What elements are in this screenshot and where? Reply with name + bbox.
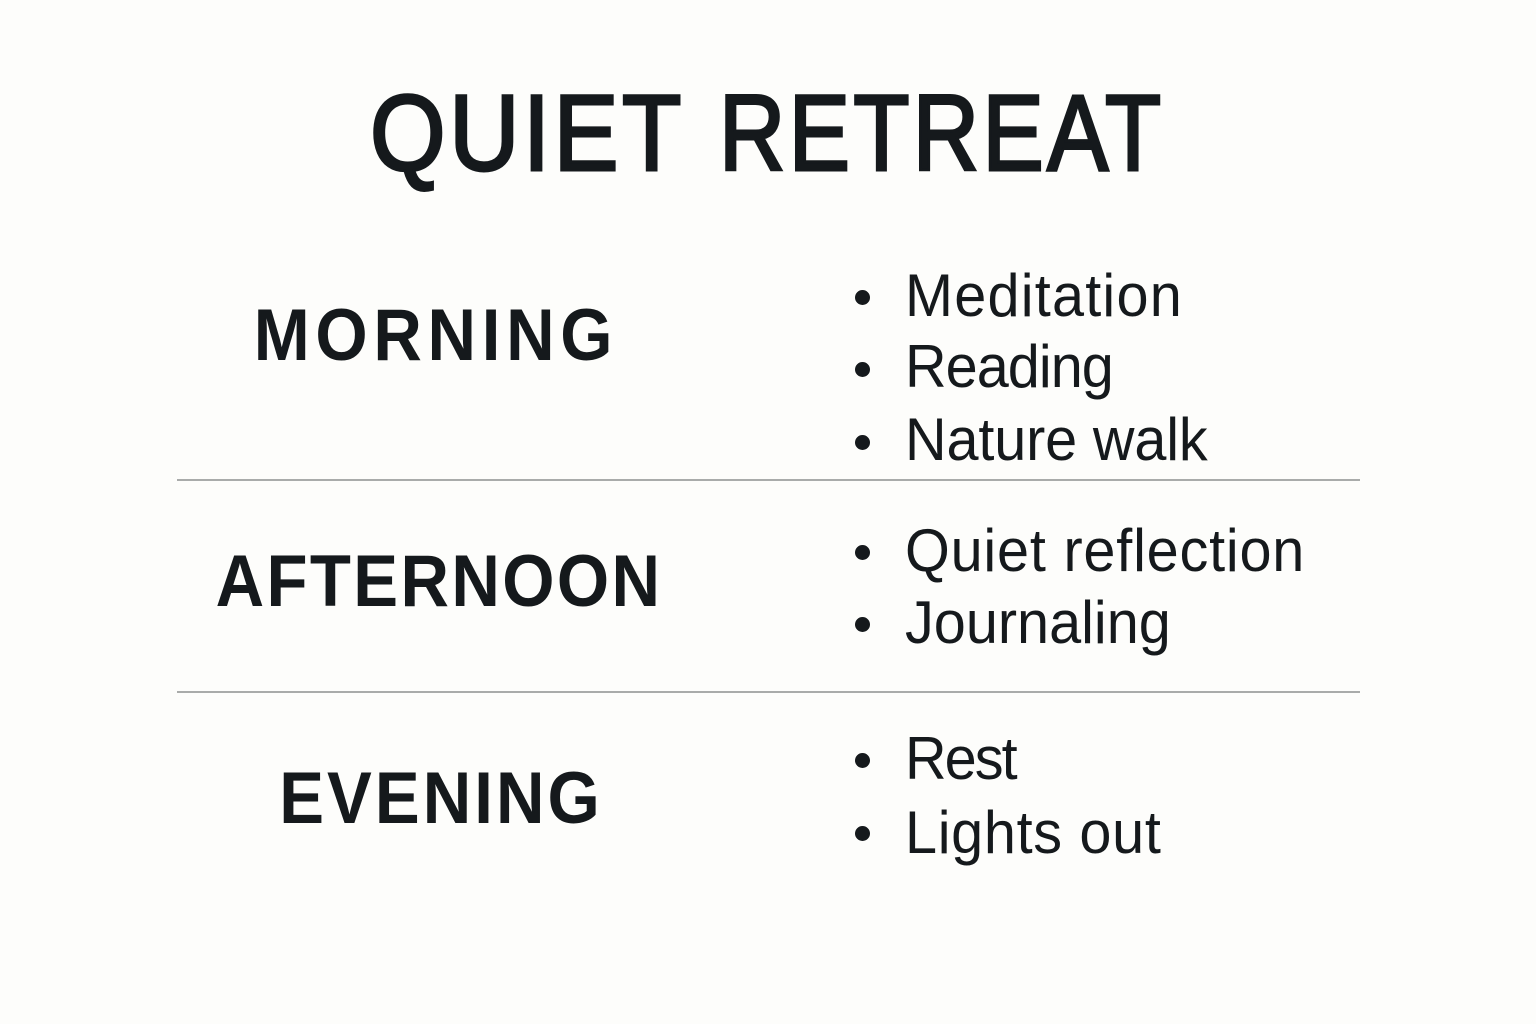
heading: afternoon: AFTERNOON bbox=[216, 541, 662, 622]
list: evening activities: Rest bbox=[905, 725, 1016, 792]
heading: evening: EVENING bbox=[279, 758, 603, 839]
title: RETREAT bbox=[719, 72, 1164, 193]
heading: morning: MORNING bbox=[254, 295, 618, 376]
title: QUIET bbox=[370, 72, 685, 193]
list: morning activities: Reading bbox=[905, 333, 1113, 400]
list: afternoon activities: Journaling bbox=[905, 589, 1171, 656]
list: morning activities: Nature walk bbox=[905, 406, 1208, 473]
list: morning activities bbox=[855, 262, 1208, 473]
list: afternoon activities bbox=[855, 517, 1305, 656]
list: morning activities: Meditation bbox=[905, 262, 1183, 329]
title bbox=[370, 72, 1164, 193]
list: evening activities bbox=[855, 725, 1162, 866]
list: evening activities: Lights out bbox=[905, 799, 1162, 866]
list: afternoon activities: Quiet reflection bbox=[905, 517, 1305, 584]
